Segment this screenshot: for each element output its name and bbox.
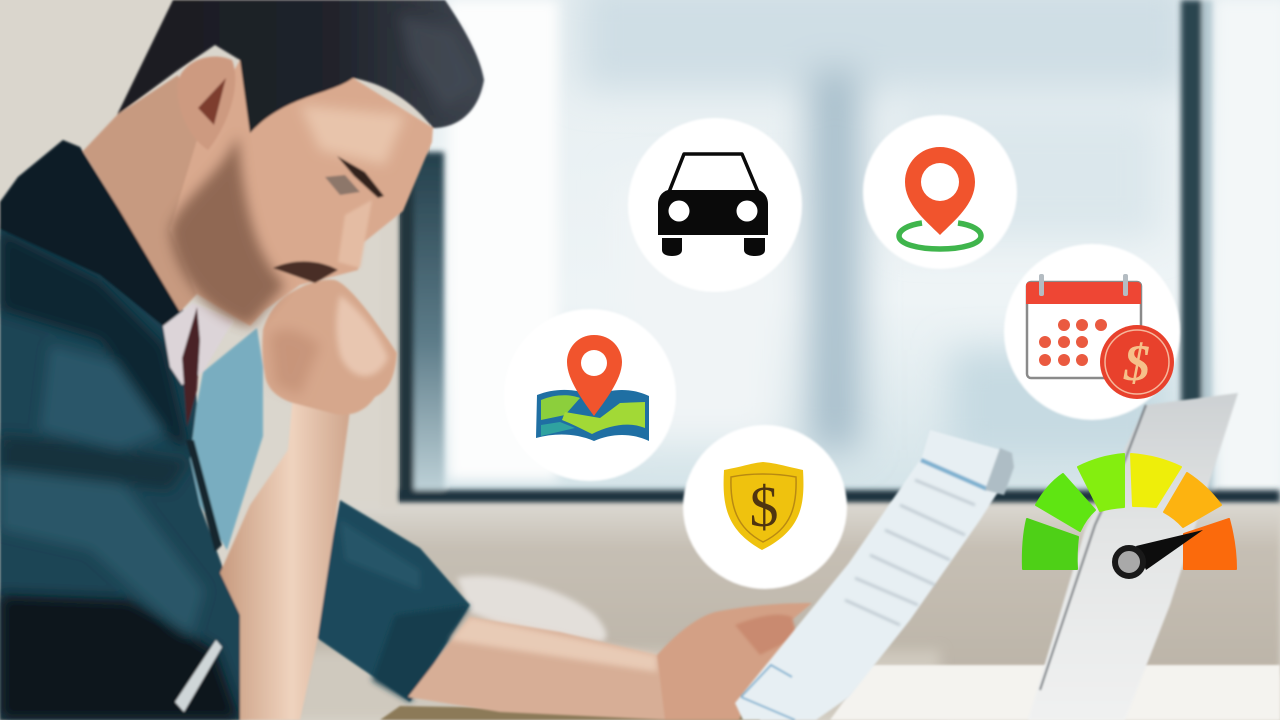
face [170,60,433,326]
person: man in dark teal shirt [0,0,812,720]
beard [170,135,285,326]
raised arm [220,395,350,720]
icon circle: location pin with ring [863,115,1017,269]
icon: dollar coin: $ [1123,335,1150,392]
gauge needle [1136,530,1203,570]
icon circle: map with pin [504,309,676,481]
icon circle: calendar with coin [1004,244,1180,420]
gauge segments [1023,454,1236,569]
hand [657,603,812,720]
shirt torso [0,140,240,720]
icon: car [658,154,768,256]
ear [177,56,235,150]
front forearm [408,617,670,720]
fist [262,280,397,415]
laptop screen back [1028,393,1238,720]
icon: orange pin [905,147,975,235]
brow [337,156,384,198]
table [380,665,1280,720]
icon: green ring [899,223,981,249]
eye [325,175,360,195]
placket [182,307,200,427]
shirt shadows and highlights [0,230,240,720]
hair [117,0,484,133]
cuff stripe [175,640,222,712]
icon: orange pin [567,335,622,416]
gauge meter [1023,454,1236,576]
back sleeve [317,500,470,702]
collar [0,140,180,326]
icon circle: shield with dollar [683,425,847,589]
inner blue shirt [190,328,263,550]
icon: folded map [536,390,649,441]
blurred cushion [457,576,606,642]
icon: gold shield: $ [750,474,778,539]
document held in hand [735,430,1014,720]
icon circle: car [628,118,802,292]
inner white shirt [163,303,233,385]
icon: calendar [1026,274,1141,378]
neck [83,75,200,312]
icon: gold shield [724,462,803,550]
icon: dollar coin [1100,325,1174,399]
